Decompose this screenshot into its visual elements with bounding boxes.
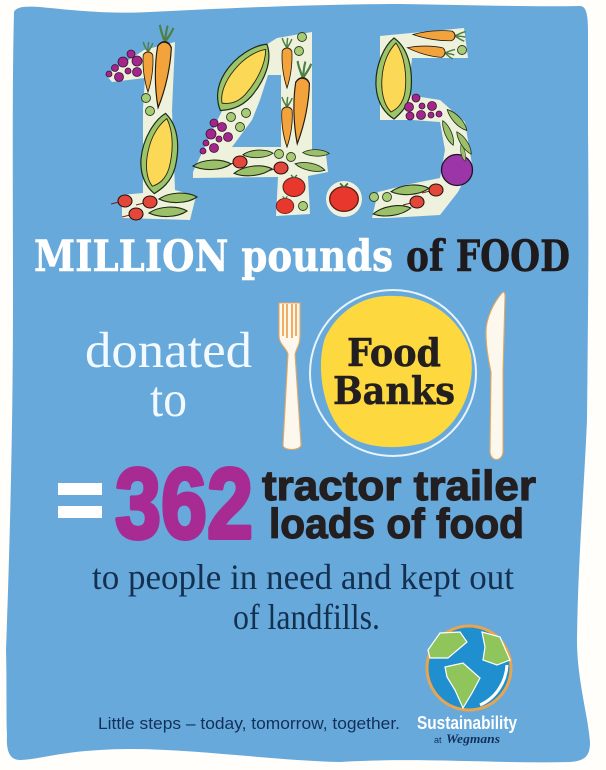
text: Food Banks: Banks: [333, 368, 455, 413]
text: to people in need and kept out of landfills: to people in need and kept out: [92, 557, 514, 597]
text: to people in need and kept out of landfills: of landfills.: [233, 597, 380, 637]
heading: MILLION pounds of FOOD: MILLION pounds: [34, 232, 393, 282]
big number: 362: 362: [115, 448, 253, 560]
digit 4: [193, 32, 330, 214]
text: donated to: to: [150, 372, 187, 428]
text: tractor trailer loads of food: loads of food: [269, 500, 524, 547]
text: tractor trailer loads of food: [262, 462, 536, 547]
logo text: Sustainability at Wegmans: Wegmans: [446, 731, 500, 746]
white backing of the digits: [106, 28, 472, 220]
logo text: Sustainability at Wegmans: [417, 713, 517, 746]
text: Food Banks: [333, 330, 455, 413]
text: tractor trailer loads of food: tractor trailer: [262, 462, 536, 509]
decimal point: tomato: [330, 183, 358, 211]
icon: knife: [486, 292, 505, 460]
icon: globe: [427, 626, 511, 710]
icon: equals sign: [58, 483, 102, 518]
digit 5: [370, 30, 474, 217]
text: to people in need and kept out of landfills: [92, 557, 514, 637]
text: donated to: donated: [85, 323, 252, 379]
text: Food Banks: Food: [347, 330, 441, 375]
icon: plate with Food Banks: [310, 290, 476, 456]
heading: MILLION pounds of FOOD: of FOOD: [406, 232, 570, 282]
tagline: Little steps – today, tomorrow, together.: [98, 714, 400, 733]
text: donated to: [85, 323, 252, 428]
icon: fork: [279, 303, 301, 450]
logo text: Sustainability at Wegmans: Sustainability: [417, 713, 517, 733]
logo text: Sustainability at Wegmans: at: [434, 735, 442, 745]
digit 1: [106, 25, 197, 220]
heading: 14.5 made of vegetables: [106, 25, 474, 220]
